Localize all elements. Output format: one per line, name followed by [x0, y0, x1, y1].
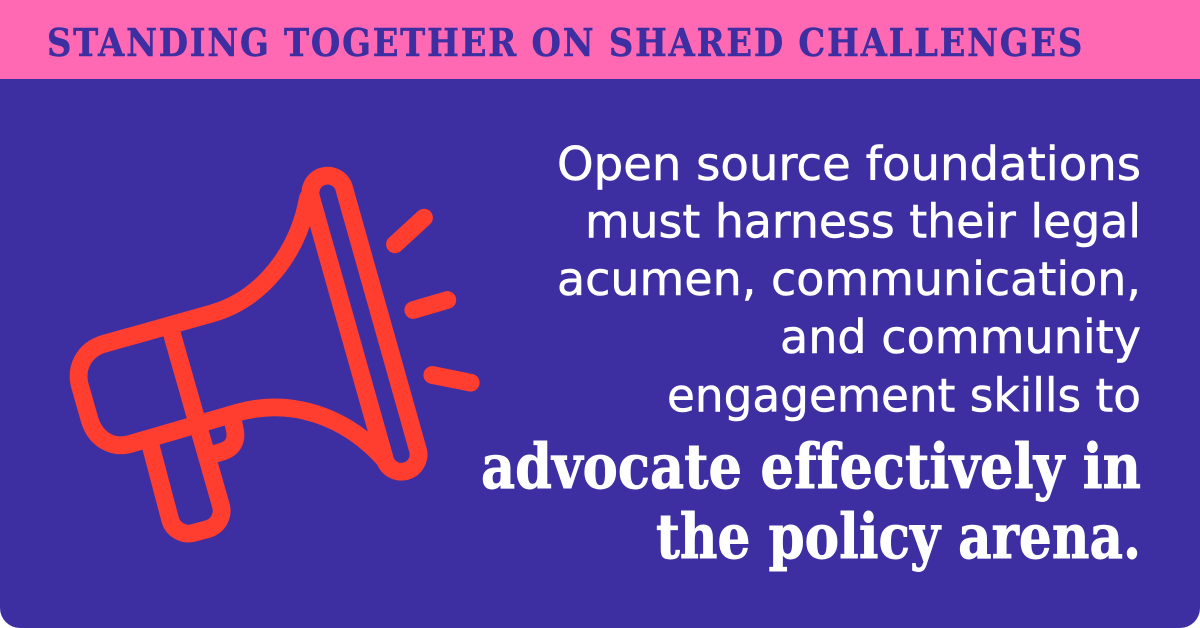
text block: main message: engagement skills to: [667, 368, 1141, 422]
panel: pink header band: [0, 0, 1200, 79]
emphasis text: [481, 430, 1141, 573]
text block: main message: must harness their legal: [585, 194, 1141, 248]
sound wave: top: [395, 218, 424, 244]
megaphone rim: [310, 176, 419, 472]
sound wave: bottom: [432, 375, 471, 383]
sound wave: middle: [413, 300, 447, 310]
text block: main message: and community: [780, 310, 1141, 364]
megaphone trigger: [211, 417, 235, 455]
text block: main message: acumen, communication,: [557, 252, 1141, 306]
text block: main message: [481, 137, 1141, 573]
text block: main message: Open source foundations: [557, 137, 1141, 191]
megaphone horn and body: [79, 198, 385, 460]
megaphone handle and divider: [151, 334, 222, 534]
heading: STANDING TOGETHER ON SHARED CHALLENGES: [47, 21, 1084, 66]
icon: megaphone: [79, 176, 471, 534]
